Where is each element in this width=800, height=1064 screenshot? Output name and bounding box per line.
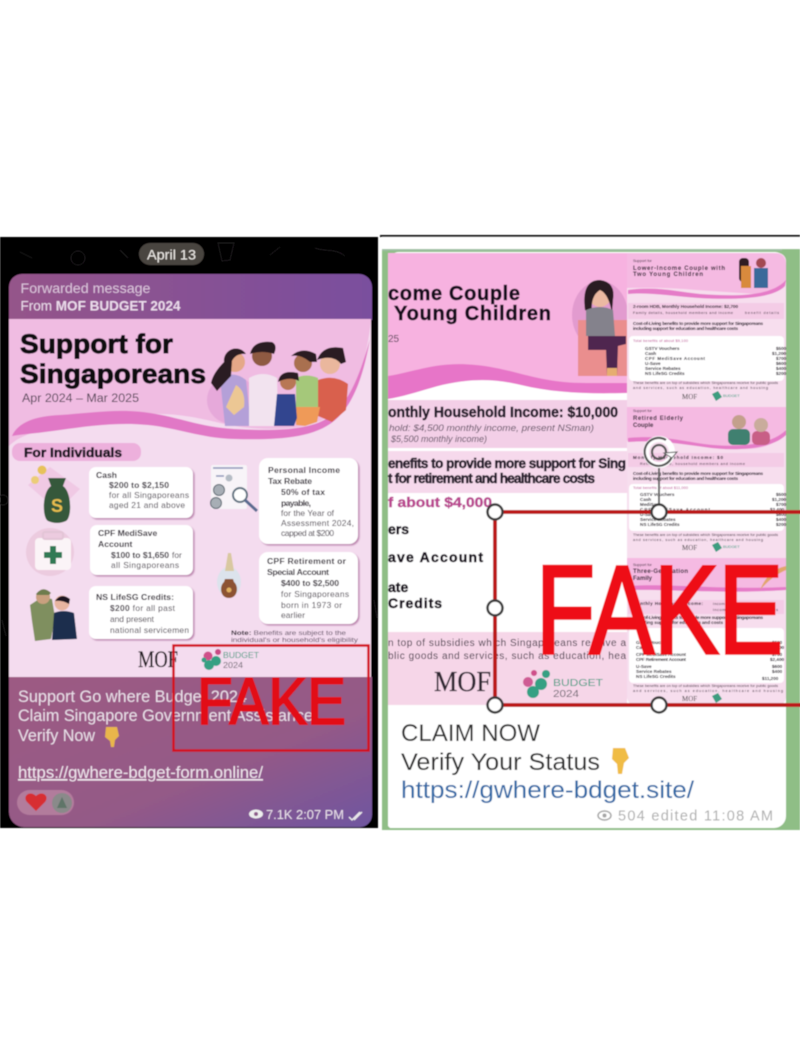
small poster: lower-income couple: BUDGET	[723, 393, 740, 398]
card: CPF retirement or special account: for Singaporeans	[281, 589, 349, 599]
benefits line: t for retirement and healthcare costs	[388, 471, 595, 486]
small poster: three-generation family: and services, such as education, healthcare and housing	[633, 689, 783, 693]
small poster: three-generation family: Service Rebates	[636, 669, 672, 674]
card: CPF retirement or special account	[259, 552, 358, 624]
small poster: retired elderly couple: $2,400	[770, 507, 784, 512]
message stats: 7.1K 2:07 PM	[266, 808, 344, 822]
small poster: lower-income couple: $200	[776, 371, 787, 376]
poster title	[20, 329, 206, 405]
card: CPF retirement or special account: earlier	[281, 610, 305, 620]
small poster: retired elderly couple: Retired couple, household members and income	[640, 462, 745, 466]
message text: Verify Now	[18, 726, 96, 745]
small poster: retired elderly couple: Cash	[640, 497, 651, 502]
forwarded header: Forwarded message	[20, 280, 151, 296]
small poster: three-generation family: $700	[772, 652, 783, 657]
benefit list: ate	[388, 579, 408, 595]
date pill	[139, 243, 204, 265]
subsidies note	[388, 638, 626, 662]
message text: Claim Singapore Government Assistance	[18, 706, 313, 725]
small poster: retired elderly couple: $1,200	[772, 497, 786, 502]
small poster: lower-income couple: 2-room HDB, Monthly Household Income: $2,700	[633, 304, 738, 309]
benefit list	[388, 521, 483, 611]
card: personal income tax rebate: capped at $200	[281, 528, 334, 538]
small poster: lower-income couple: U-Save	[645, 361, 661, 366]
small poster: retired elderly couple: GSTV Vouchers	[640, 492, 675, 497]
card: cash	[89, 467, 193, 518]
poster title: Support for	[20, 329, 173, 359]
link: https://gwhere-bdget-form.online/	[18, 764, 263, 782]
benefits line	[388, 456, 626, 486]
heading: for individuals: For Individuals	[24, 446, 122, 460]
fake stamp: right, with selection handles	[488, 438, 800, 712]
small poster: lower-income couple: MOF	[682, 393, 697, 401]
small poster: retired elderly couple	[627, 407, 787, 552]
card: CPF retirement or special account: CPF Retirement or	[267, 556, 347, 566]
small poster: lower-income couple: Support for	[633, 259, 653, 263]
logo: Budget 2024	[523, 670, 604, 700]
fake stamp: left	[174, 646, 368, 750]
message text: CLAIM NOW	[401, 720, 540, 747]
benefits line: enefits to provide more support for Sing	[388, 456, 626, 471]
logo: MOF: MOF	[434, 666, 491, 698]
small poster: three-generation family: Family	[633, 576, 653, 582]
poster: support for Singaporeans	[9, 319, 371, 677]
benefit list: Credits	[388, 595, 442, 611]
small poster: lower-income couple: Family details, household members and income	[633, 311, 733, 315]
forwarded header: From MOF BUDGET 2024	[20, 298, 181, 314]
small poster: three-generation family: $1,200	[770, 645, 784, 650]
card: personal income tax rebate	[259, 458, 358, 544]
card: CPF retirement or special account: $400 to $2,500	[281, 578, 339, 588]
fake stamp: left: FAKE	[197, 664, 346, 738]
message bubble	[9, 274, 372, 827]
small poster: retired elderly couple: and services, such as education, healthcare and housing	[633, 538, 763, 542]
poster title: Apr 2024 – Mar 2025	[22, 393, 139, 405]
illustration: seated woman	[572, 280, 628, 376]
small poster: lower-income couple	[627, 253, 787, 401]
icon: pointing hand	[105, 727, 119, 747]
small poster: three-generation family: income and household details	[713, 608, 778, 612]
small poster: retired elderly couple: $200	[776, 522, 787, 527]
small poster: lower-income couple: These benefits are on top of subsidies which Singaporeans receive for public goods	[633, 381, 778, 385]
small poster: lower-income couple: $1,200	[772, 351, 786, 356]
card: NS LifeSG credits: $200 for all past	[110, 603, 176, 613]
card: CPF MediSave: for	[172, 550, 182, 560]
income line	[388, 405, 618, 444]
small poster: retired elderly couple: MOF	[682, 544, 697, 552]
card: personal income tax rebate: Tax Rebate	[268, 476, 312, 486]
small poster: lower-income couple: $600	[776, 361, 787, 366]
poster heading: Young Children	[394, 303, 551, 325]
card: CPF MediSave: Account	[98, 539, 133, 549]
small poster: retired elderly couple: Retired Elderly	[633, 416, 684, 422]
poster heading	[388, 283, 551, 345]
small poster: three-generation family: Cost-of-Living benefits to provide more support for Singaporeans	[633, 615, 763, 620]
benefit list: ers	[388, 521, 409, 537]
forwarded header	[20, 280, 181, 314]
small poster: three-generation family: $11,200	[762, 676, 779, 681]
note: Note: Benefits are subject to the	[231, 630, 346, 637]
small poster: retired elderly couple: Total benefits of about $11,000	[633, 486, 688, 490]
logo: MOF: MOF	[138, 647, 178, 672]
message text: Support Go where Budget 2024	[18, 687, 247, 706]
small poster: lower-income couple: Lower-Income Couple with	[633, 266, 725, 272]
small poster: three-generation family: $500	[772, 640, 783, 645]
card: CPF retirement or special account: Special Account	[267, 567, 329, 577]
small poster: lower-income couple: NS LifeSG Credits	[645, 371, 685, 376]
note: individual's or household's eligibility	[231, 637, 359, 644]
income line: onthly Household Income: $10,000	[388, 405, 618, 421]
small poster: three-generation family: including support for education and costs	[633, 620, 723, 625]
logo: Budget 2024: 2024	[553, 688, 579, 700]
benefit list: ave Account	[388, 549, 483, 565]
small poster: retired elderly couple: Service Rebates	[640, 517, 676, 522]
message text	[401, 720, 600, 776]
card: CPF MediSave: CPF MediSave	[98, 528, 157, 538]
small poster: lower-income couple: Total benefits of about $9,100	[633, 339, 688, 343]
panel: left telegram screenshot	[0, 237, 378, 828]
icon: pointing hand	[612, 748, 629, 774]
small poster: three-generation family: MOF	[682, 695, 697, 703]
message stats	[249, 808, 362, 822]
small poster: lower-income couple: Cost-of-Living benefits to provide more support for Singaporeans	[633, 321, 763, 326]
small poster: retired elderly couple: NS LifeSG Credits	[640, 522, 680, 527]
small poster: lower-income couple: Two Young Children	[633, 272, 703, 278]
logo: Budget 2024: 2024	[223, 661, 244, 670]
small poster: three-generation family: $2,400	[770, 657, 784, 662]
income line: hold: $4,500 monthly income, present NSman)	[389, 423, 594, 433]
small poster: retired elderly couple: U-Save	[640, 512, 656, 517]
small poster: retired elderly couple: Cost-of-Living benefits to provide more support for Singaporeans	[633, 471, 763, 476]
small poster: lower-income couple: $400	[776, 366, 787, 371]
card: personal income tax rebate: Assessment 2024,	[281, 518, 354, 528]
logo: Budget 2024: BUDGET	[223, 651, 259, 660]
card: personal income tax rebate: 50% of tax	[281, 487, 325, 497]
small poster: retired elderly couple: CPF MediSave Account	[640, 507, 710, 512]
small poster: retired elderly couple: $500	[776, 492, 787, 497]
poster column: three small posters	[627, 253, 787, 705]
card: cash: for all Singaporeans	[109, 490, 189, 500]
poster heading: 25	[388, 334, 400, 345]
small poster: retired elderly couple: Monthly Household Income: $0	[633, 455, 723, 460]
small poster: three-generation family: U-Save	[636, 664, 652, 669]
small poster: retired elderly couple: $700	[776, 502, 787, 507]
poster: zoomed couple poster	[388, 253, 628, 705]
panel: right telegram screenshot	[380, 235, 800, 830]
small poster: lower-income couple: $700	[776, 356, 787, 361]
small poster: lower-income couple: benefit details	[745, 311, 779, 315]
icon: rotate handle	[645, 438, 677, 466]
icon: retirement savings bag	[217, 553, 241, 598]
small poster: three-generation family: These benefits are on top of subsidies which Singaporeans receive for public goods	[633, 684, 778, 688]
small poster: retired elderly couple: MediSave	[640, 502, 662, 507]
small poster: three-generation family: CPF MediSave Account	[636, 652, 686, 657]
small poster: retired elderly couple: including support for education and healthcare costs	[633, 476, 738, 481]
card: cash: aged 21 and above	[109, 500, 185, 510]
message stats: 504 edited 11:08 AM	[618, 808, 773, 824]
small poster: retired elderly couple: Support for	[633, 409, 653, 413]
small poster: lower-income couple: $500	[776, 346, 787, 351]
date pill: April 13	[147, 246, 196, 262]
amount: f about $4,000	[388, 494, 492, 510]
message text: Verify Your Status	[401, 749, 600, 776]
income line: $5,500 monthly income)	[390, 434, 487, 444]
small poster: three-generation family: Cash	[636, 645, 647, 650]
poster heading: come Couple	[388, 283, 520, 305]
card: NS LifeSG credits: national servicemen	[110, 625, 189, 635]
small poster: three-generation family: Support for	[633, 563, 653, 567]
logo: Budget 2024	[202, 649, 259, 670]
card: NS LifeSG credits: and present	[110, 614, 155, 624]
small poster: three-generation family: Three-Generation	[633, 569, 688, 575]
card: CPF MediSave	[90, 525, 193, 575]
card: personal income tax rebate: payable,	[281, 498, 311, 508]
small poster: three-generation family: GSTV Vouchers	[636, 640, 671, 645]
small poster: three-generation family: income and household details	[713, 602, 773, 606]
small poster: three-generation family: Monthly Household Income:	[633, 601, 703, 606]
card: CPF MediSave: all Singaporeans	[111, 560, 179, 570]
small poster: three-generation family: CPF Retirement Account	[636, 657, 686, 662]
small poster: lower-income couple: CPF MediSave Account	[645, 356, 705, 361]
small poster: lower-income couple: including support for education and healthcare costs	[633, 326, 738, 331]
small poster: retired elderly couple: $400	[776, 517, 787, 522]
link: https://gwhere-bdget.site/	[401, 777, 694, 804]
note	[231, 630, 359, 644]
heading: for individuals	[12, 443, 141, 461]
logo: Budget 2024: BUDGET	[553, 677, 604, 689]
reactions	[17, 790, 74, 815]
card: personal income tax rebate: for the Year of	[281, 508, 335, 518]
icon: money bag: S	[51, 496, 63, 516]
icon: money bag	[28, 466, 80, 523]
small poster: lower-income couple: and services, such as education, healthcare and housing	[633, 386, 768, 390]
small poster: retired elderly couple: Couple	[633, 423, 654, 429]
icon: medical kit	[26, 528, 74, 576]
small poster: three-generation family: $400	[772, 669, 783, 674]
wave	[12, 339, 370, 439]
small poster: retired elderly couple: $600	[776, 512, 787, 517]
card: cash: $200 to $2,150	[109, 480, 169, 490]
subsidies note: blic goods and services, such as education, hea	[388, 651, 626, 662]
subsidies note: n top of subsidies which Singaporeans receive a	[388, 638, 626, 649]
poster title: Singaporeans	[20, 359, 206, 389]
card: CPF MediSave: $100 to $1,650	[111, 550, 169, 560]
card: personal income tax rebate: Personal Income	[268, 465, 340, 475]
icon: national servicemen	[30, 589, 77, 641]
card: cash: Cash	[96, 470, 117, 480]
small poster: lower-income couple: GSTV Vouchers	[645, 346, 680, 351]
small poster: three-generation family: NS LifeSG Credits	[636, 674, 676, 679]
message text	[18, 687, 313, 745]
small poster: retired elderly couple: These benefits are on top of subsidies which Singaporeans receive for public goods	[633, 533, 778, 537]
small poster: three-generation family: $600	[772, 664, 783, 669]
small poster: lower-income couple: Cash	[645, 351, 656, 356]
icon: tax documents and magnifier	[210, 465, 257, 511]
card: CPF retirement or special account: born in 1973 or	[281, 600, 342, 610]
card: NS LifeSG credits	[89, 586, 193, 639]
illustration: family	[207, 342, 348, 426]
small poster: retired elderly couple: BUDGET	[723, 544, 740, 549]
card: NS LifeSG credits: NS LifeSG Credits:	[96, 592, 174, 602]
small poster: lower-income couple: Service Rebates	[645, 366, 681, 371]
small poster: three-generation family	[627, 558, 786, 703]
